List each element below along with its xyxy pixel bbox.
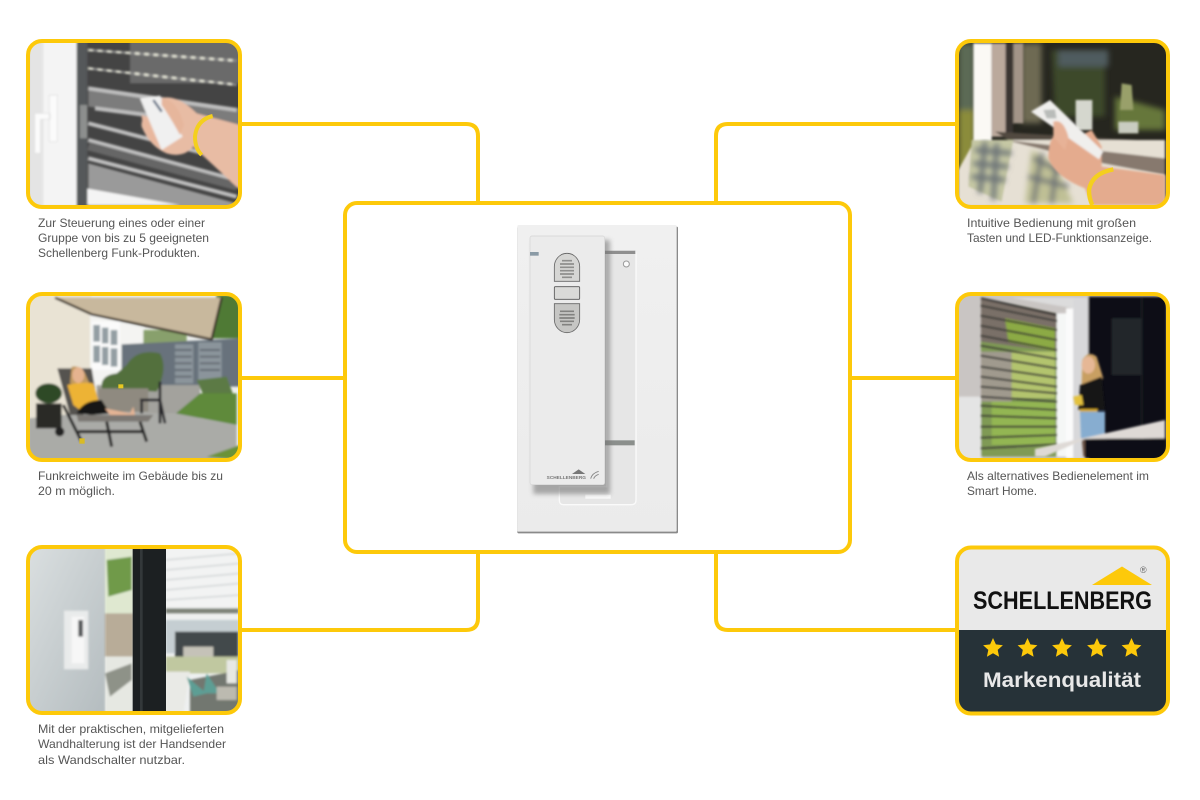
panel: central product frame [345, 203, 850, 552]
text: caption 4 [967, 216, 1152, 245]
panel: photo remote mounted as wall switch [30, 549, 238, 711]
logo roof [1092, 566, 1152, 585]
frame: photo 5 [957, 294, 1168, 460]
logo wordmark: SCHELLENBERG [973, 587, 1152, 615]
logo on remote [547, 469, 599, 480]
text: caption 2: 20 m möglich. [38, 484, 115, 498]
text: caption 2: Funkreichweite im Gebäude bis zu [38, 469, 223, 483]
text: caption 3: als Wandschalter nutzbar. [38, 753, 185, 767]
badge label: Markenqualität [983, 669, 1141, 692]
text: caption 5: Smart Home. [967, 484, 1037, 498]
text: caption 1: Zur Steuerung eines oder einer [38, 216, 205, 230]
text: caption 4: Tasten und LED-Funktionsanzeige. [967, 231, 1152, 245]
text: caption 5: Als alternatives Bedienelement im [967, 469, 1149, 483]
button: up [554, 253, 580, 281]
text: caption 3 [38, 722, 226, 767]
frame: photo 4 [957, 41, 1168, 207]
text: caption 4: Intuitive Bedienung mit großen [967, 216, 1136, 230]
logo registered mark: ® [1140, 565, 1147, 575]
button: down [554, 304, 580, 333]
text: caption 1: Schellenberg Funk-Produkten. [38, 246, 200, 260]
text: caption 2 [38, 469, 223, 498]
frame: photo 2 [28, 294, 240, 460]
button: stop [554, 287, 580, 299]
connector: middle right [850, 376, 957, 380]
text: caption 5 [967, 469, 1149, 498]
frame: photo 1 [28, 41, 240, 207]
connector: bottom left [240, 552, 478, 630]
connector: bottom right [716, 552, 957, 630]
frame: photo 3 [28, 547, 240, 713]
text: caption 3: Mit der praktischen, mitgelieferten [38, 722, 224, 736]
panel: photo hand with remote at roller shutter [30, 43, 238, 205]
logo on remote: SCHELLENBERG [547, 475, 587, 480]
text: caption 1 [38, 216, 209, 260]
panel: photo hand with remote at window [959, 43, 1166, 205]
panel: photo woman at window with roller shutter [959, 296, 1166, 458]
five stars [983, 638, 1141, 657]
product: remote control with wall bracket [517, 225, 678, 533]
connector: top right [716, 124, 957, 203]
connector: middle left [240, 376, 345, 380]
connector: top left [240, 124, 478, 203]
text: caption 3: Wandhalterung ist der Handsender [38, 737, 226, 751]
badge: Schellenberg brand quality [957, 547, 1168, 714]
panel: photo woman on terrace under awning [30, 296, 238, 458]
text: caption 1: Gruppe von bis zu 5 geeigneten [38, 231, 209, 245]
